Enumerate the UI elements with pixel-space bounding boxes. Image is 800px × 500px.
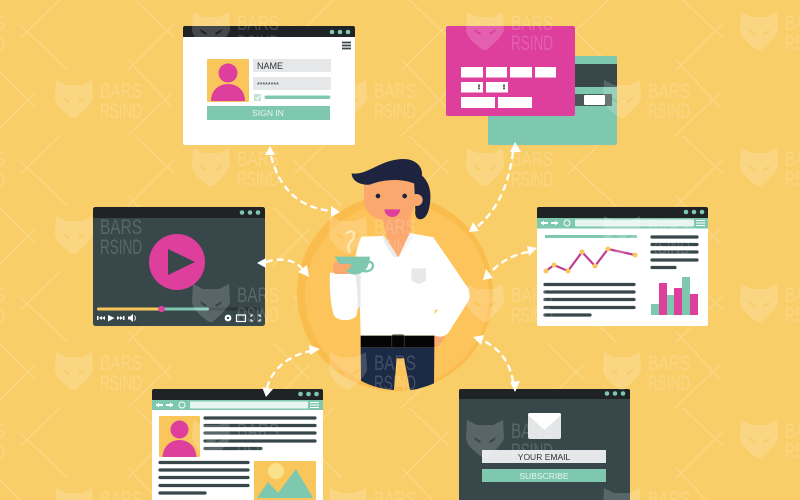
icon: user avatar (159, 416, 200, 457)
text lines right (205, 418, 315, 448)
mouth (384, 209, 400, 217)
email field: YOUR EMAIL (518, 452, 570, 462)
sign in button (207, 106, 330, 120)
subscribe button (482, 469, 606, 482)
arrow: email to person (482, 340, 513, 382)
sun circle behind person (297, 195, 493, 391)
arrow: profile to person (267, 351, 311, 388)
arrowheads: login (265, 146, 340, 217)
arrowheads: chart (483, 246, 537, 280)
name field (253, 59, 331, 72)
hair back (412, 170, 430, 219)
right arm (433, 237, 469, 326)
ear (411, 194, 423, 206)
player controls (97, 314, 260, 322)
text lines left (545, 284, 634, 315)
subscribe button: SUBSCRIBE (519, 471, 569, 481)
arrow: login to person (271, 156, 332, 211)
card front (446, 26, 575, 116)
panel: credit card (446, 26, 617, 145)
card back (488, 56, 617, 145)
seek bar (97, 306, 262, 312)
arrow: chart to person (490, 252, 528, 273)
trousers (361, 347, 434, 390)
name field: NAME (257, 61, 283, 71)
steam (347, 231, 354, 252)
text lines left (160, 462, 248, 493)
line chart (544, 235, 638, 274)
person (330, 159, 469, 390)
arrow: video to person (266, 260, 304, 271)
panel: email subscribe window (459, 389, 630, 500)
bar chart (651, 277, 698, 315)
icon: menu (342, 42, 351, 48)
browser toolbar (537, 218, 708, 228)
panel: login window (183, 26, 355, 145)
shirt (358, 233, 435, 336)
sign in button: SIGN IN (252, 108, 284, 118)
neck (382, 213, 411, 257)
browser toolbar (152, 400, 323, 410)
icon: envelope (528, 413, 561, 439)
arrowheads: card (469, 142, 521, 232)
panel: video player (93, 207, 265, 326)
face (364, 177, 414, 221)
hand and cup (333, 257, 373, 275)
arrow: card to person (476, 152, 513, 228)
remember me checkbox (254, 94, 330, 101)
panel: profile window (152, 389, 323, 500)
eyes (376, 194, 380, 198)
text lines right (652, 237, 697, 268)
image placeholder (254, 461, 316, 500)
arrowheads: email (473, 335, 520, 392)
left arm (330, 237, 362, 320)
belt (361, 336, 434, 347)
hand right (434, 326, 446, 347)
collar (383, 233, 398, 257)
password field: ******** (257, 82, 279, 89)
password field (253, 77, 331, 90)
arrowheads: video (257, 258, 309, 277)
email field (482, 450, 606, 463)
icon: user avatar (207, 59, 249, 102)
pocket (411, 268, 426, 284)
arrowheads: profile (262, 345, 320, 397)
icon: play button (149, 234, 205, 290)
hair front (352, 159, 422, 185)
panel: analytics window (537, 207, 708, 326)
